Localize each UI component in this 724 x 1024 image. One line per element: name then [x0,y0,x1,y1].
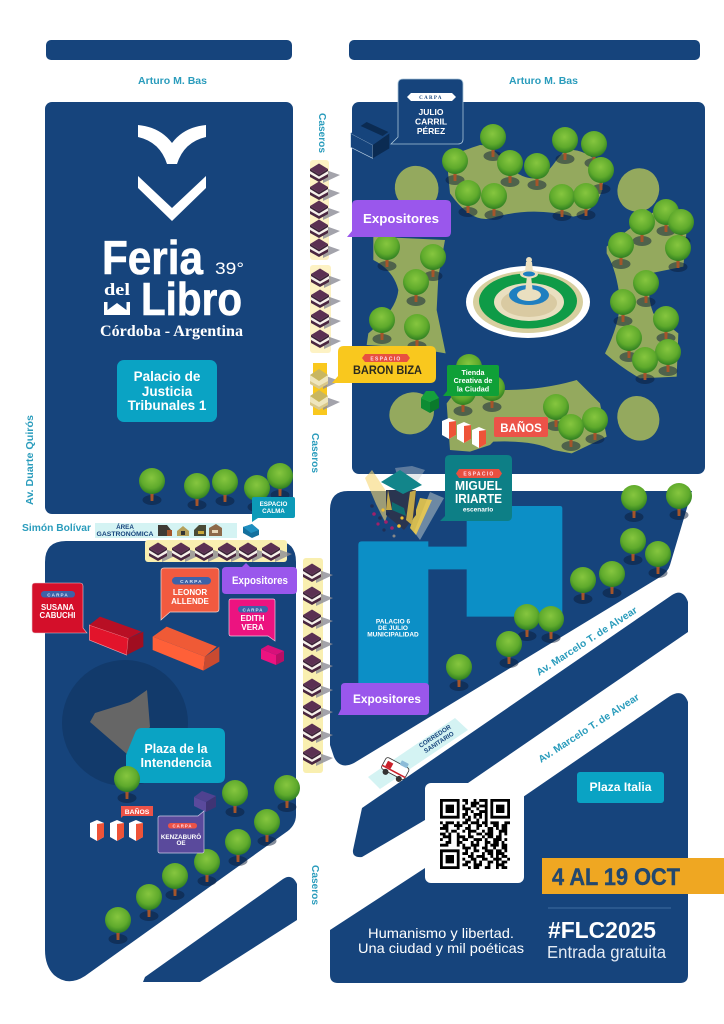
label: Baños plaza: BAÑOS [125,807,150,816]
strip: Área Gastronómica: GASTRONÓMICA [96,529,154,538]
map circle Plaza [62,660,188,786]
park trees [369,124,694,451]
callout: Edith Vera: EDITH [240,614,265,623]
callout: Leonor Allende: CARPA [180,579,203,585]
blue building Palacio 6 de Julio: PALACIO 6 [376,618,410,626]
callout: Espacio Calma [252,497,295,522]
callout: Miguel Iriarte: escenario [463,506,493,514]
callout: Edith Vera: VERA [241,623,264,632]
icon: stage with crowd [365,466,444,540]
strip: Corredor Sanitario: SANITARIO [423,730,455,755]
callout: Expositores north [347,200,451,237]
label: Plaza de la Intendencia [126,728,225,783]
icon: toilets plaza [90,820,143,841]
callout: Tienda Creativa: Tienda [461,368,486,377]
hashtag and entry [547,908,671,962]
callout: Susana Cabuchi: CARPA [47,592,69,597]
label: Baños park [494,417,548,437]
label: Plaza Italia: Plaza Italia [590,780,652,794]
top road bar left [46,40,292,60]
slogan: Humanismo y libertad. [368,925,514,941]
callout: Kenzaburo Oe: OE [176,840,186,847]
callout: Miguel Iriarte [440,455,512,521]
block: Palacio 6 de Julio [330,491,692,765]
callout: Julio Carril Pérez: CARPA [419,96,443,101]
logo: Feria del Libro [100,125,244,340]
callout: Julio Carril Pérez: JULIO [418,107,444,117]
tree over plaza label [114,766,140,803]
street trees [105,463,692,944]
block: Plaza de la Intendencia [45,541,296,981]
callout: Miguel Iriarte: MIGUEL [455,479,502,493]
park gardens [367,145,687,453]
callout: Baron Biza: ESPACIO [370,356,402,362]
callout: Expositores Bolívar [222,563,297,594]
tent: Leonor Allende [153,627,219,671]
callout: Tienda Creativa: la Ciudad [457,384,489,394]
callout: Leonor Allende: LEONOR [173,588,207,597]
callout: Julio Carril Pérez: PÉREZ [417,126,445,136]
logo: Feria del Libro: Feria [102,231,204,284]
logo: Feria del Libro: del [104,280,130,299]
blue building Palacio 6 de Julio: DE JULIO [378,625,408,632]
diagonal strip Alvear [353,593,688,857]
callout: Expositores Bolívar: Expositores [232,575,288,587]
street labels: Simón Bolívar [22,523,91,534]
logo: Feria del Libro: Libro [141,273,242,325]
callout: Edith Vera: CARPA [242,607,264,612]
hashtag and entry: #FLC2025 [548,917,656,943]
blue building Palacio 6 de Julio: MUNICIPALIDAD [367,632,419,638]
block: Palacio de Justicia [45,102,293,514]
block: Plaza Italia [330,693,688,983]
slogan [358,925,524,956]
tent: Edith Vera [261,645,284,665]
street labels: Av. Marcelo T. de Alvear [535,605,640,679]
callout: Espacio Calma: ESPACIO [260,501,288,508]
date banner [542,858,724,894]
callout: Tienda Creativa: Creativa de [454,376,492,385]
icon: green box tienda [421,391,439,413]
callout: Baron Biza [332,346,436,383]
icon: toilets park [442,418,486,448]
street labels: Av. Marcelo T. de Alvear [537,692,642,766]
callout: Julio Carril Pérez [391,79,463,144]
label: Plaza de la Intendencia: Plaza de la [144,741,208,756]
label: Plaza de la Intendencia: Intendencia [140,755,212,770]
callout: Edith Vera [229,599,275,641]
label: Palacio de Justicia: Tribunales 1 [128,398,207,413]
street labels: Caseros [309,433,320,473]
street labels: Arturo M. Bas [509,76,578,87]
callout: Miguel Iriarte: IRIARTE [455,492,502,506]
tent: Kenzaburo Oe [194,791,216,812]
hashtag and entry: Entrada gratuita [547,942,666,962]
label: Palacio de Justicia [117,360,217,422]
strip: Área Gastronómica: ÁREA [116,522,134,531]
logo: Feria del Libro: 39° [215,259,244,278]
label: Baños park: BAÑOS [500,422,542,435]
top road bar right [349,40,700,60]
callout: Kenzaburo Oe: KENZABURÓ [161,832,201,841]
strip: Área Gastronómica [95,522,237,538]
tent: Susana Cabuchi [89,617,143,655]
map Córdoba silhouette [90,690,150,755]
callout: Espacio Calma: CALMA [262,508,285,515]
callout: Expositores palacio: Expositores [353,692,421,706]
callout: Baron Biza: BARON BIZA [353,365,422,377]
fountain [466,257,590,338]
street labels: Av. Duarte Quirós [25,415,36,505]
date banner: 4 AL 19 OCT [552,864,680,891]
tent: Julio Carril Pérez [351,122,389,158]
stalls row Simón Bolívar [145,540,292,562]
strip: Corredor Sanitario: CORREDOR [418,724,453,750]
callout: Susana Cabuchi: SUSANA [41,603,74,612]
callout: Leonor Allende: ALLENDE [171,597,210,606]
icon: Espacio Calma van [243,524,259,538]
block: park [352,102,705,474]
callout: Leonor Allende [161,568,219,620]
callout: Susana Cabuchi [32,583,87,633]
street labels: Arturo M. Bas [138,76,207,87]
callout: Kenzaburo Oe: CARPA [173,824,192,829]
label: Plaza Italia [577,772,664,803]
street labels: Caseros [309,865,320,905]
callout: Miguel Iriarte: ESPACIO [463,472,495,478]
callout: Julio Carril Pérez: CARRIL [415,116,447,126]
diagonal strip lower left [143,877,297,982]
callout: Susana Cabuchi: CABUCHI [40,611,75,620]
stalls column lower Caseros [303,558,333,773]
icon: ambulance [379,753,412,784]
label: Palacio de Justicia: Palacio de [134,369,201,384]
label: Palacio de Justicia: Justicia [142,384,193,399]
blue building Palacio 6 de Julio [358,506,562,685]
callout: Tienda Creativa [443,365,499,396]
label: Baños plaza [121,806,153,818]
street labels [22,76,642,905]
callout: Kenzaburo Oe [158,811,204,853]
callout: Expositores north: Expositores [363,211,439,226]
street labels: Caseros [316,113,327,153]
stalls column Caseros [310,160,341,415]
logo: Feria del Libro: Córdoba - Argentina [100,323,243,340]
slogan: Una ciudad y mil poéticas [358,940,524,956]
callout: Expositores palacio [338,683,429,715]
strip: Corredor Sanitario [368,718,468,789]
QR code [425,783,524,883]
